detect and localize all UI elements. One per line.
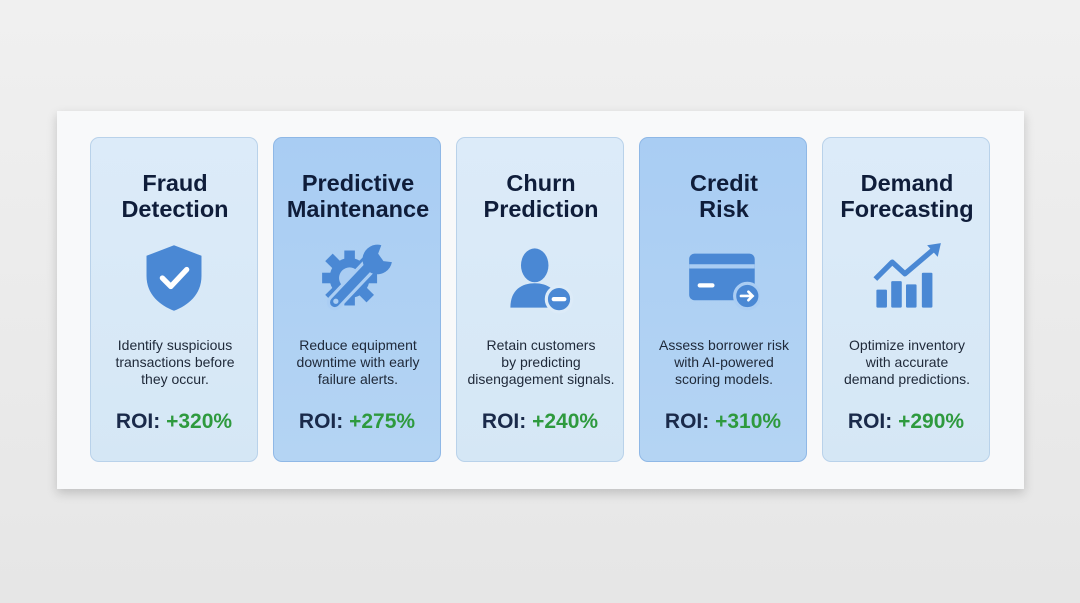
title: Forecasting	[840, 196, 974, 222]
description	[467, 337, 615, 387]
description: Assess borrower risk	[659, 337, 789, 353]
card: fraud detection	[90, 137, 258, 462]
description: disengagement signals.	[467, 371, 615, 387]
title: Predictive	[302, 170, 414, 196]
title: Risk	[699, 196, 749, 222]
title: Fraud	[142, 170, 208, 196]
description: Optimize inventory	[849, 337, 965, 353]
title: Detection	[121, 196, 229, 222]
description	[659, 337, 789, 387]
card: predictive maintenance	[273, 137, 441, 462]
description: transactions before	[115, 354, 235, 370]
title	[840, 170, 974, 222]
title	[287, 170, 429, 222]
title: Churn	[506, 170, 576, 196]
title	[690, 170, 758, 222]
roi: ROI: +310%	[665, 410, 781, 433]
title: Credit	[690, 170, 758, 196]
roi: ROI: +240%	[482, 410, 598, 433]
description: failure alerts.	[318, 371, 398, 387]
description: downtime with early	[297, 354, 419, 370]
icon: user minus	[510, 248, 570, 310]
title: Maintenance	[287, 196, 429, 222]
title: Prediction	[484, 196, 598, 222]
panel: white board	[57, 111, 1024, 489]
roi: ROI: +275%	[299, 410, 415, 433]
card: demand forecasting	[822, 137, 990, 462]
roi: ROI: +290%	[848, 410, 964, 433]
icon: chart trend	[874, 243, 941, 308]
roi: ROI: +320%	[116, 410, 232, 433]
icon: credit card arrow	[689, 254, 758, 308]
description	[297, 337, 420, 387]
title	[121, 170, 229, 222]
description: by predicting	[501, 354, 581, 370]
icon: shield check	[146, 245, 202, 311]
card: credit risk	[639, 137, 807, 462]
description: with AI-powered	[674, 354, 774, 370]
description	[115, 337, 235, 387]
description: Reduce equipment	[299, 337, 417, 353]
description: scoring models.	[675, 371, 773, 387]
title: Demand	[861, 170, 953, 196]
description	[844, 337, 970, 387]
description: Retain customers	[487, 337, 595, 353]
description: with accurate	[866, 354, 948, 370]
description: they occur.	[141, 371, 209, 387]
icon: gear wrench	[322, 244, 392, 308]
description: demand predictions.	[844, 371, 970, 387]
card: churn prediction	[456, 137, 624, 462]
description: Identify suspicious	[118, 337, 232, 353]
title	[484, 170, 598, 222]
